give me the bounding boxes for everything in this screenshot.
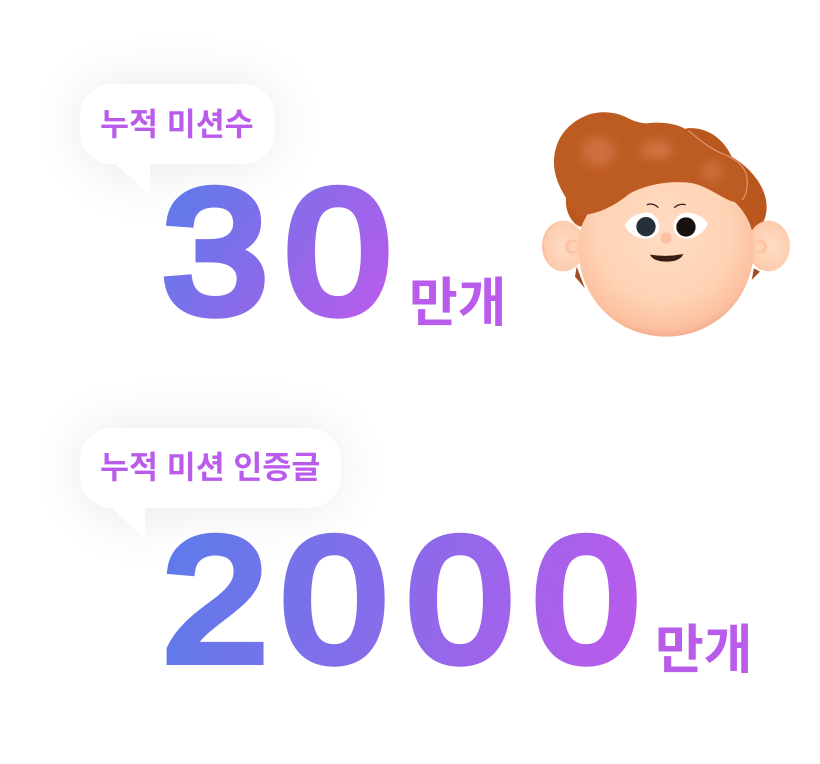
- number: 30: 30: [163, 153, 391, 349]
- unit: 2000 man: 만개: [655, 621, 753, 680]
- callout: cumulative mission posts: 누적 미션 인증글: [100, 449, 320, 485]
- mouth: [650, 254, 683, 262]
- callout: cumulative missions: 누적 미션수: [100, 106, 254, 142]
- face: [578, 178, 754, 337]
- eyebrows: [647, 204, 685, 207]
- nose: [660, 232, 672, 244]
- back hair: [566, 128, 767, 233]
- number: 2000: 2000: [163, 501, 639, 697]
- left ear: [542, 221, 585, 271]
- left eye: [625, 213, 659, 239]
- right eye: [673, 213, 708, 239]
- callout: cumulative mission posts: [80, 428, 341, 540]
- front hair: [554, 112, 747, 215]
- right ear: [747, 221, 790, 271]
- icon: 3D boy face: [542, 112, 790, 337]
- unit: 30 man: 만개: [409, 274, 507, 333]
- callout: cumulative missions: [80, 84, 275, 196]
- lower hair shade: [575, 267, 760, 288]
